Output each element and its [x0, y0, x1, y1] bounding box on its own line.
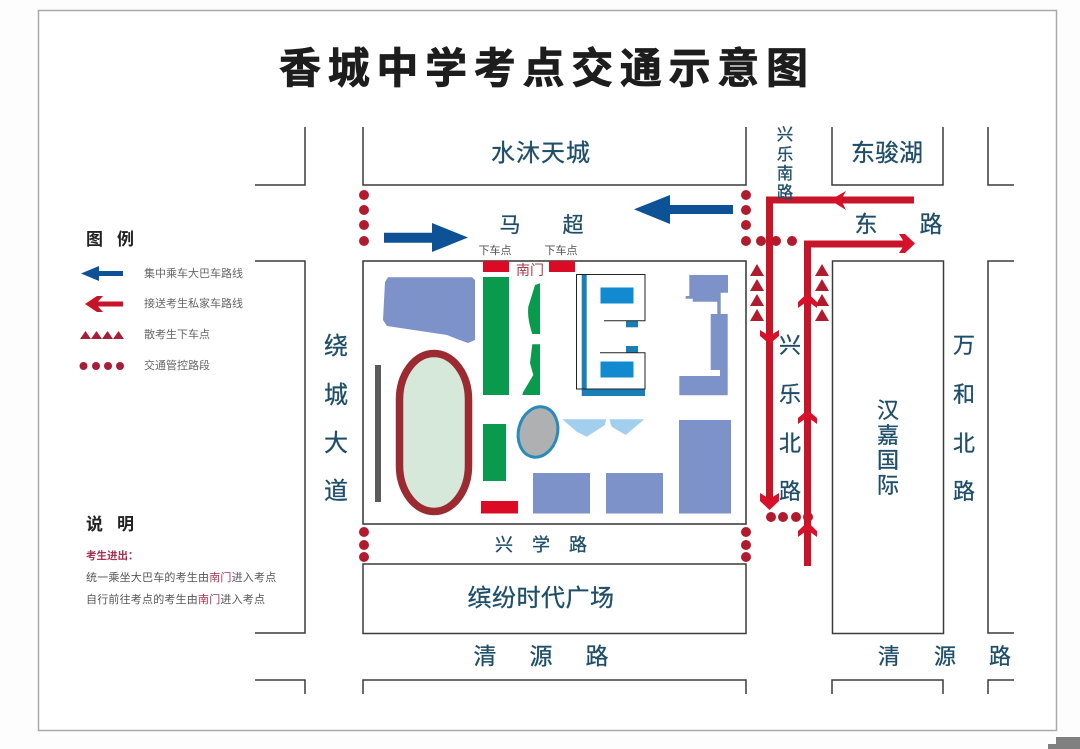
label: 万和北路 [953, 333, 975, 504]
notes line 1: 统一乘坐大巴车的考生由南门进入考点 [86, 570, 276, 584]
drop-off point labels: 下车点 [478, 243, 512, 257]
label: 缤纷时代广场: 缤纷时代广场 [468, 585, 614, 612]
label: 清源路 left [474, 643, 608, 669]
legend: drop-off point [80, 327, 210, 341]
label: 东骏湖: 东骏湖 [851, 140, 923, 167]
label: 万和北路: 路 [953, 479, 975, 504]
label: 东路 [854, 211, 942, 237]
label: 兴乐北路: 乐 [779, 382, 801, 407]
label: 兴乐北路: 路 [779, 479, 801, 504]
label: 东路: 路 [920, 211, 942, 237]
label: 汉嘉国际: 国 [877, 448, 899, 473]
drop-off point labels: 下车点 [544, 243, 578, 257]
blue bus arrow east [384, 223, 468, 252]
title: 香城中学考点交通示意图 [279, 45, 815, 92]
notes subheading: 考生进出： [86, 549, 138, 562]
label: 兴学路: 学 [532, 535, 550, 555]
label: 清源路 right [878, 644, 1011, 669]
label: 绕城大道: 大 [324, 430, 348, 457]
label: 兴乐南路: 乐 [777, 145, 793, 164]
legend heading: 例 [117, 230, 134, 249]
notes [86, 515, 276, 606]
pond ellipse [513, 403, 563, 461]
drop-off markers [483, 261, 575, 272]
corner scan mark [1048, 737, 1080, 749]
notes heading: 明 [117, 515, 134, 534]
label: 清源路 right: 源 [934, 644, 956, 669]
label: 绕城大道: 道 [324, 478, 348, 505]
label: 水沐天城: 水沐天城 [491, 140, 591, 167]
blue buildings south [533, 420, 731, 514]
label: 兴学路: 路 [569, 535, 587, 555]
gray strip [375, 365, 381, 502]
legend: traffic control [80, 358, 210, 372]
label: 绕城大道: 城 [324, 382, 348, 409]
label: 清源路 right: 路 [989, 644, 1011, 669]
road block outlines [255, 127, 1014, 694]
legend: traffic control: 交通管控路段 [144, 358, 210, 372]
label: 万和北路: 北 [953, 431, 975, 456]
legend heading: 图 [86, 230, 103, 249]
label: 兴乐南路: 南 [777, 164, 793, 183]
campus boundary [363, 261, 746, 524]
drop-off triangles [750, 264, 829, 321]
notes line 2: 自行前往考点的考生由南门进入考点 [86, 592, 265, 606]
road and place labels [324, 125, 1011, 669]
south gate label: 南门 [516, 262, 544, 278]
notes heading [86, 515, 134, 534]
notes heading: 说 [86, 515, 103, 534]
label: 清源路 left: 清 [474, 643, 496, 669]
legend [80, 230, 243, 372]
label: 马超 [500, 214, 584, 237]
label: 兴乐南路: 兴 [777, 125, 793, 144]
east building [679, 275, 728, 395]
label: 汉嘉国际 [877, 398, 899, 498]
blue bus arrow west [634, 195, 733, 224]
label: 兴学路: 兴 [495, 535, 513, 555]
legend: bus route: 集中乘车大巴车路线 [144, 266, 243, 280]
label: 马超: 超 [562, 214, 584, 237]
red route up and east [808, 244, 908, 566]
legend: private car route [85, 296, 243, 312]
traffic control dots [359, 190, 813, 562]
label: 清源路 right: 清 [878, 644, 900, 669]
label: 兴乐北路: 兴 [779, 333, 801, 358]
label: 清源路 left: 路 [586, 643, 608, 669]
label: 万和北路: 和 [953, 382, 975, 407]
label: 兴乐北路: 北 [779, 431, 801, 456]
label: 万和北路: 万 [953, 333, 975, 358]
label: 清源路 left: 源 [530, 643, 552, 669]
label: 兴学路 [495, 535, 587, 555]
legend heading [86, 230, 134, 249]
red arrowheads [760, 191, 915, 537]
label: 绕城大道: 绕 [324, 333, 348, 360]
label: 汉嘉国际: 嘉 [877, 423, 899, 448]
blue building northwest [383, 277, 475, 343]
teaching building [576, 274, 645, 396]
label: 兴乐南路 [777, 125, 794, 202]
school campus map [363, 261, 746, 524]
label: 绕城大道 [324, 333, 348, 505]
label: 汉嘉国际: 汉 [877, 398, 899, 423]
legend: bus route [81, 266, 243, 281]
drop-off point labels [478, 243, 578, 257]
green areas [483, 277, 540, 481]
light blue canopies [562, 419, 644, 437]
running track [400, 354, 468, 512]
red route down [770, 200, 914, 505]
legend: drop-off point: 散考生下车点 [144, 327, 210, 341]
label: 兴乐北路 [779, 333, 801, 504]
legend: private car route: 接送考生私家车路线 [144, 296, 243, 310]
label: 兴乐南路: 路 [777, 183, 794, 202]
label: 汉嘉国际: 际 [877, 473, 899, 498]
label: 马超: 马 [500, 214, 520, 237]
label: 东路: 东 [854, 211, 878, 237]
red bar [481, 501, 518, 514]
